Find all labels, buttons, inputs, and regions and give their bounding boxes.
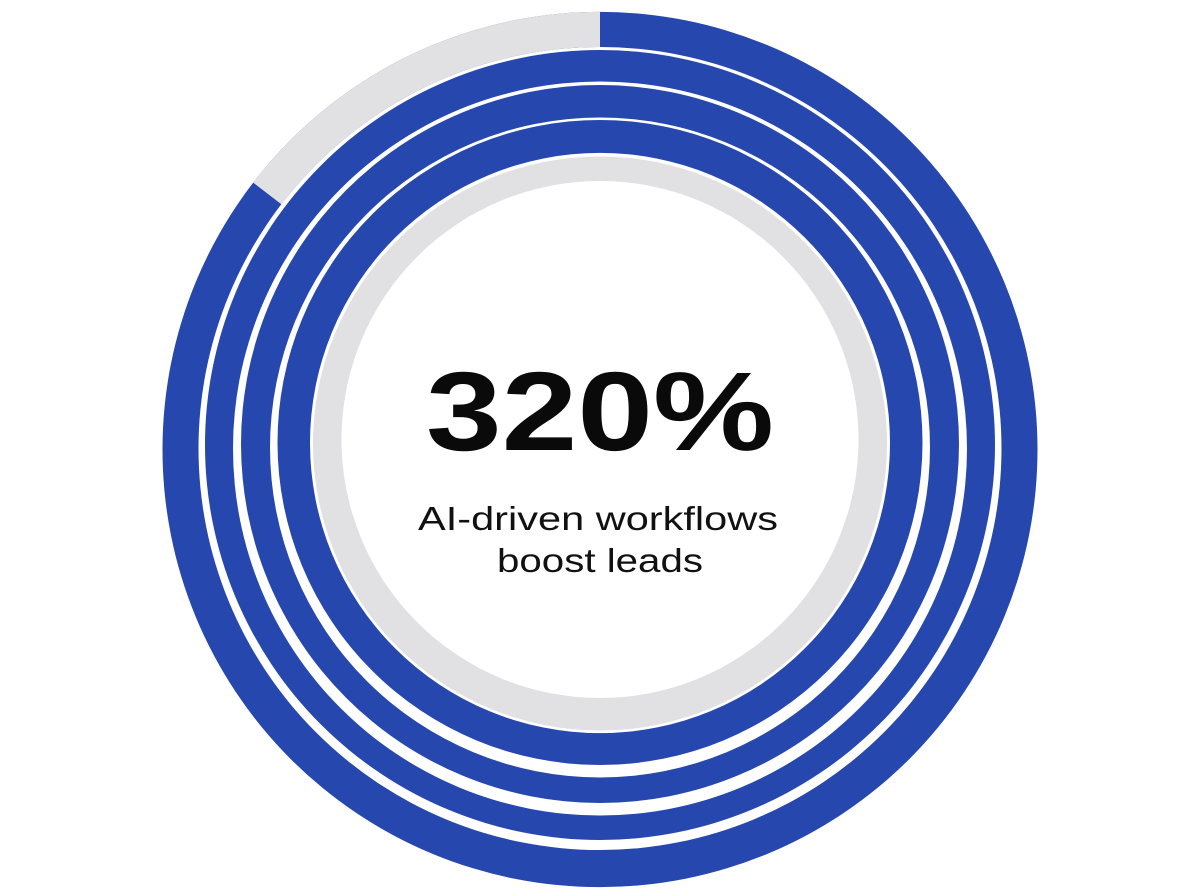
outer ring progress	[162, 12, 1038, 887]
inner grey ring	[313, 156, 887, 730]
subtitle: boost leads	[497, 542, 703, 579]
ring chart	[162, 12, 1038, 887]
subtitle: AI-driven workflows	[418, 500, 778, 537]
outer ring remaining track	[253, 12, 600, 204]
ring 4	[278, 120, 922, 765]
headline number: 320%	[426, 349, 774, 474]
ring 2	[205, 50, 995, 840]
subtitle	[418, 500, 778, 579]
ring 3	[241, 85, 959, 803]
